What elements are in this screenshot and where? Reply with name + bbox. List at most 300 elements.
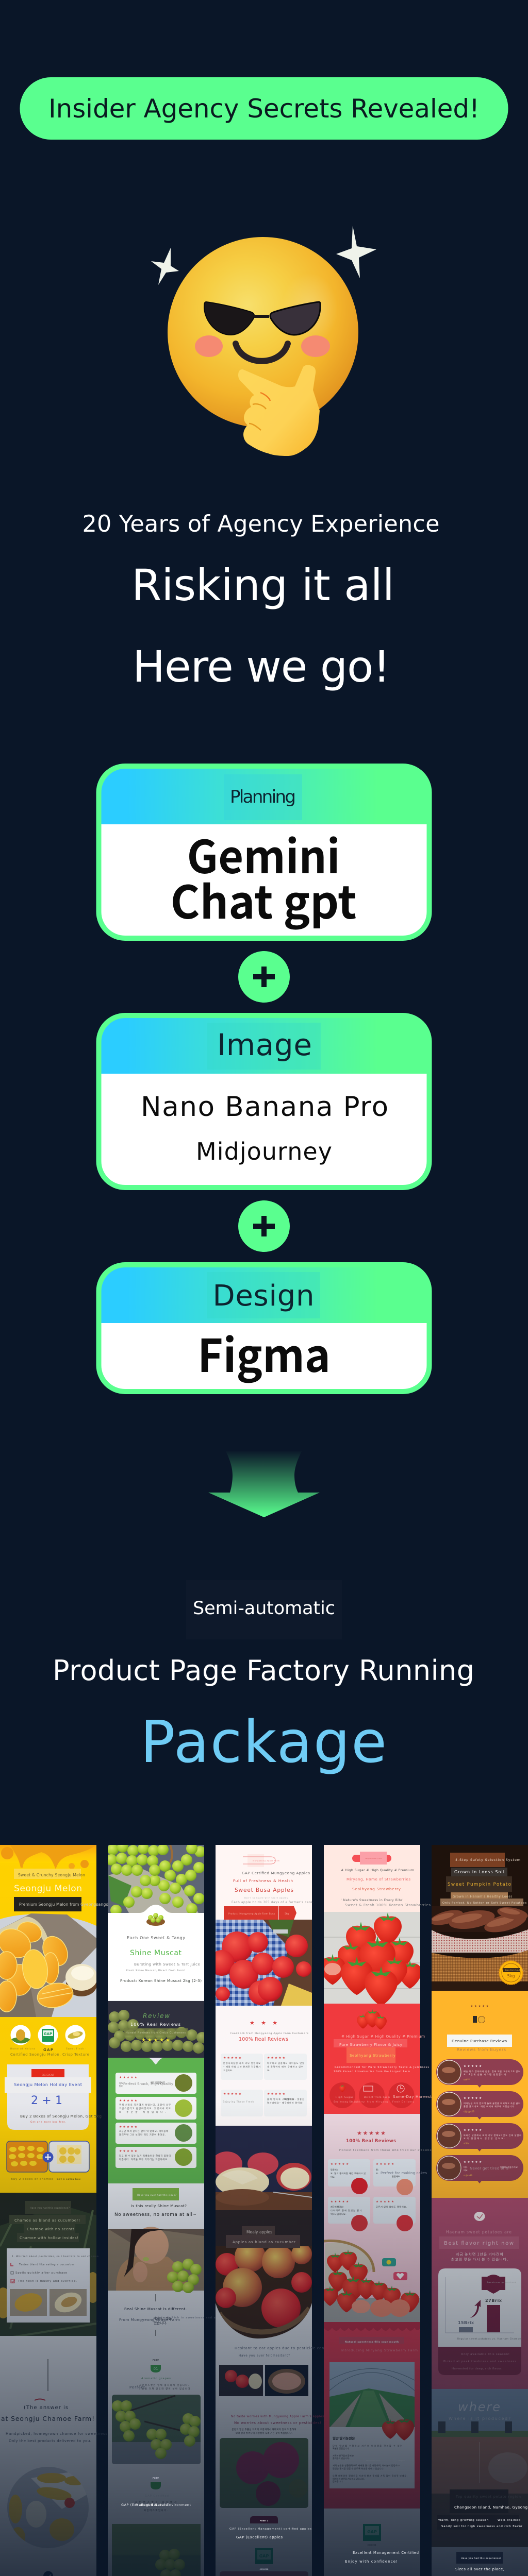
captions: column 3 gap: [229, 2520, 311, 2570]
product box images: Buy 2 boxes of chamoe: [11, 2178, 54, 2181]
strawberry hero photo: [320, 1912, 422, 2006]
brix chart card: [438, 2268, 521, 2375]
green review section: 정도: [119, 2081, 123, 2085]
panel: planning card: [96, 764, 432, 941]
pink review section: 달콤해요.: [392, 2175, 401, 2178]
orange review section: ★★★★★: [464, 2129, 482, 2132]
green review section: ★★★★★: [119, 2099, 137, 2103]
label: design: [207, 1272, 320, 1318]
icon: sparkle star right: [336, 226, 376, 278]
green review section: 조금만 보석 같다는 말이 딱 맞네요. 테이블에: [119, 2129, 168, 2133]
three badges: Certified Seongju Melon, Crisp Texture: [10, 2053, 89, 2057]
orange review section: 쓰5ils: [464, 2142, 469, 2145]
top pill banner: Insider Agency Secrets Revealed!: [48, 94, 480, 124]
honey drips: [0, 1845, 96, 1869]
tools: nano banana pro and midjourney: Midjourney: [196, 1138, 332, 1165]
different statement: Real Shine Muscat is different.: [124, 2307, 187, 2311]
label: semi-automatic: Semi-automatic: [193, 1598, 335, 1619]
problem section dark photo: Have you had this experience?: [30, 2207, 70, 2210]
pink review section: ★★★★★: [331, 2200, 349, 2204]
hero texts: Miryang, Home of Strawberries: [346, 1877, 410, 1882]
label: planning: [224, 774, 302, 820]
tools: gemini and chat gpt: Chat gpt: [170, 867, 357, 932]
maroon farm section: Introducing Miryang Strawberry Farm: [341, 2348, 418, 2352]
gap logo: [255, 2548, 273, 2564]
arrow: green down arrow: [208, 1450, 320, 1517]
captions: column 5 region and experience: Well-drained: [498, 2519, 520, 2522]
hero texts: [14, 1869, 122, 1911]
white intro section: Product: Korean Shine Muscat 2kg (2-3): [120, 1978, 202, 1983]
maroon farm section: 여러분의 방문을 기다리고 있습니다.: [333, 2477, 365, 2481]
no worries text: [231, 2415, 324, 2435]
maroon flavor section: [432, 2198, 528, 2389]
captions: column 2 points: Managed Nature: [136, 2503, 168, 2507]
red feature section: Same-Day Harvest: [393, 2095, 432, 2099]
gap logo: GAP: [259, 2554, 269, 2558]
captions: column 2 points: GAP (Excellent Natural Environment: [121, 2503, 191, 2507]
maroon farm section: [324, 2322, 420, 2509]
pink review section: 먹으니 꿀이 나요~: [331, 2212, 347, 2216]
red feature section: # High Sugar # High Quality # Premium: [341, 2034, 425, 2039]
green review section: ★★★★★: [119, 2125, 137, 2129]
review header: ★★★★★: [141, 2038, 170, 2043]
review section: ★★★★★: [223, 2056, 241, 2060]
issue section: [108, 2183, 204, 2229]
pink review section: ★★★★★: [376, 2200, 394, 2204]
different statement: 샤인머스캣은: [153, 2315, 172, 2320]
answer section: [0, 2336, 109, 2576]
basket apples photo: Mealy apples: [246, 2230, 272, 2234]
heading: 20 years: 20 Years of Agency Experience: [82, 511, 439, 537]
captions: column 5 region and experience: Sizes all over the place,: [455, 2567, 504, 2571]
pink review section: 요. 딸기 좋아하면 매년 구매하고 있: [331, 2172, 366, 2175]
checklist card: 1. Worried about pesticides, so I hesitate to eat chamoe: [12, 2255, 98, 2258]
white intro section: Fresh Shine Muscat, Direct from Farm!: [126, 1969, 185, 1972]
problem section dark photo: Chamoe as bland as cucumber!: [14, 2218, 80, 2223]
hero texts: Seolhyang Strawberry: [352, 1887, 401, 1891]
heading: product page factory running: Product Page Factory Running: [53, 1654, 474, 1687]
hesitant text and two photos: Have you ever felt hesitant?: [239, 2354, 290, 2358]
event card: Get one more box free.: [30, 2121, 66, 2124]
point 01: Aromatic grapes: [141, 2377, 171, 2380]
product box images: Get 1 extra box: [57, 2178, 80, 2181]
captions: column 5 region and experience: Have you had this experience?: [461, 2557, 502, 2560]
orange review section: 배송 박스 뜯자마자 감동. 진짜 썩은 고구마 1도 없어: [464, 2070, 520, 2073]
problem section dark photo: Chamoe with no scent!: [27, 2227, 74, 2231]
different statement: [119, 2294, 224, 2336]
captions: column 3 gap: 0000008: [260, 2568, 269, 2570]
captions: column 2 points: [121, 2477, 191, 2576]
panel: image card: [96, 1013, 432, 1190]
white intro section: Each One Sweet & Tangy: [127, 1936, 185, 1940]
review section: 게 잘먹어서 매년 구매하고 있어: [267, 2065, 303, 2069]
red feature section: Direct from Farm: [364, 2096, 390, 2099]
last apple photo: [220, 2571, 308, 2576]
red feature section: 100% Korean Strawberries from the Largest Farm: [334, 2070, 410, 2073]
gap logo: [324, 2509, 420, 2576]
green review section: 에도 방문합니다.: [151, 2081, 166, 2084]
answer section: Only the best products delivered to you.: [9, 2439, 91, 2443]
bottom fade overlay: [0, 2102, 528, 2576]
green review section: 올려두면 그냥 보기만 해도 기분이 좋아요.: [119, 2133, 166, 2137]
captions: column 3 gap: GAP (Excellent) apples: [236, 2535, 283, 2539]
event card: [5, 2064, 102, 2130]
review section: ★★★★★: [223, 2092, 241, 2096]
tools: gemini and chat gpt: [170, 821, 357, 932]
cut apple photo: [211, 2126, 312, 2210]
review section: [216, 2006, 312, 2126]
green review section: ★★★★★: [119, 2149, 137, 2153]
panel: column 3 busa apples page: [216, 1845, 324, 2576]
label: design: Design: [212, 1279, 315, 1313]
pink review section: 무른기 없이 쓸데도 탱탱어요.: [376, 2205, 407, 2209]
issue section: No sweetness, no aroma at all~: [114, 2212, 196, 2217]
captions: column 5 region and experience: Changseon Island, Namhae, Gyeong: [454, 2505, 527, 2510]
review header: Review: [143, 2012, 170, 2020]
hero texts: Sweet Busa Apples: [235, 1887, 293, 1893]
maroon farm section: Region: [399, 2460, 405, 2462]
captions: column 4 confidence: Excellent Management Certified: [353, 2551, 419, 2555]
vineyard photo: [112, 2395, 201, 2464]
orange review section: ★★★★★: [464, 2065, 482, 2068]
orange review section: sujina99: [464, 2174, 472, 2177]
review section: 100% Real Reviews: [239, 2037, 288, 2042]
red feature section: Pure Strawberry Flavor & Juicy: [339, 2042, 402, 2047]
tools: nano banana pro and midjourney: [141, 1091, 388, 1165]
panel: column 4 strawberry page: [324, 1845, 432, 2576]
panel: column 5 sweet potato page: [428, 1845, 528, 2576]
orange review section: 요게 달콤해서 실망한 없어요.: [464, 2137, 505, 2140]
farm field photo: Top quality sweet potato region: [455, 2495, 521, 2499]
point 01: 기간을 거쳐 당도와 향이 살아 있습니다.: [139, 2387, 191, 2391]
different statement: Rich in sweetness and aroma: [172, 2316, 224, 2319]
green review section: 주석 선물로 지인에게 보냈는데, 포장이 너무: [119, 2103, 171, 2107]
icon: thinking emoji with sunglasses: [151, 226, 376, 456]
hero texts: Don't Compare with Store Apples: [244, 1897, 288, 1899]
review section: ★★★: [250, 2020, 277, 2026]
review section: 문경사과농원 사과 너무 맛있어요: [223, 2061, 260, 2065]
farm field photo: [432, 2389, 528, 2547]
basket of strawberries photo: [322, 2241, 420, 2322]
sweet potato hero photo: [428, 1845, 528, 1991]
point 01: 01: [154, 2367, 158, 2371]
issue section: Have you ever had this issue?: [137, 2194, 177, 2197]
point 01: Perfect: [129, 2385, 145, 2389]
no worries text: 보라 향이 뛰어나며 저장성이 오래 가는 것이 특징입니다.: [236, 2431, 292, 2435]
orange review section: [432, 1991, 528, 2198]
event card: 2 + 1: [31, 2094, 62, 2107]
captions: column 5 region and experience: Warm, long growing season: [438, 2519, 488, 2522]
green review section: [108, 2058, 204, 2183]
orange review section: ★★★★★: [464, 2097, 482, 2100]
hero texts: GAP Certified Mungyeong Apples: [242, 1871, 310, 1875]
maroon flavor section: Best flavor right now: [444, 2241, 514, 2246]
basket apples photo: [216, 2210, 312, 2339]
orange review section: Reviews from Buyers: [457, 2047, 506, 2052]
red feature section: High Sugar: [336, 2096, 353, 2099]
answer section: Handpicked, homegrown chamoe for sweetness.: [6, 2432, 109, 2436]
circular melon box photo: [7, 2467, 89, 2548]
orange review section: Never get tired of it: [470, 2166, 508, 2171]
pink review section: 어요.: [331, 2175, 335, 2179]
checklist card: The flesh is mushy and overripe.: [18, 2280, 77, 2283]
pink review section: Honest feedback from those who tried our strawberries: [339, 2149, 440, 2152]
review section: 명사과네요~ 재구매하러 왔어요!: [267, 2101, 303, 2105]
point 02: 샤인머스캣을 농장에서: [135, 2500, 176, 2504]
white intro section: Bursting with Sweet & Tart Juice: [134, 1962, 200, 1967]
no worries text: No taste worries with Mungyeong Apple Farm's apples: [231, 2415, 324, 2418]
farm field photo: where: [458, 2400, 500, 2414]
red feature section: [324, 2004, 432, 2114]
pink review section: 달콤해서: [331, 2168, 339, 2172]
orange review section: Genuine Purchase Reviews: [452, 2039, 507, 2043]
red feature section: Seolhyang Strawberry: [334, 2100, 365, 2104]
heading: here we go: Here we go!: [133, 641, 390, 692]
pink review section: ★★★★★: [357, 2130, 386, 2137]
green review section: 다릅니다. 가족들 모두 기다리는 과일이에요.: [119, 2158, 168, 2161]
green review section: 또 주문할 예정입니다.: [119, 2110, 166, 2114]
maroon farm section: 저희 농원은 친환경적으로 재배된 딸기를 자랑하며, 여러분이 건강하고: [333, 2464, 400, 2467]
point 01: [129, 2359, 191, 2391]
pink review section: 줄:: [376, 2168, 378, 2172]
maroon farm section: 당일 딸기를 수확하고 저온의 아이템을 관리할 수 있는: [333, 2444, 402, 2448]
dark bottom section: [432, 2547, 528, 2576]
hesitant text and two photos: Hesitant to eat apples due to pesticide concerns: [235, 2346, 335, 2350]
melon hero photo: [0, 1913, 97, 2017]
label: semi-automatic: [186, 1580, 342, 1639]
tools: nano banana pro and midjourney: Nano Banana Pro: [141, 1091, 388, 1123]
hero texts: Sweet & Crunchy Seongju Melon: [18, 1873, 85, 1877]
brix chart card: Only available this season!: [461, 2353, 509, 2356]
sweet potato hero photo: Pesticide-Free: [505, 1969, 525, 1972]
hero text boxes: Grown in Hanam's Healthy Loess: [453, 1895, 512, 1899]
hesitant text and two photos: [219, 2346, 335, 2396]
different statement: From Mungyeong Grape Farm: [119, 2317, 180, 2322]
hero texts: Full of Freshness & Health: [233, 1878, 293, 1883]
bright captions over fade: [24, 2477, 527, 2576]
red feature section: Recommended for Pure Strawberry Taste & Juiciness: [335, 2066, 429, 2069]
white intro section: [108, 1905, 204, 2001]
product box images: [7, 2141, 89, 2181]
hero texts: # High Sugar # High Quality # Premium: [341, 1868, 414, 1872]
orange review section: 대다: [464, 2165, 468, 2169]
green review section: ★★★★★: [119, 2076, 137, 2079]
red feature section: from Miryang: [367, 2100, 388, 2104]
review section: 고 있어요.: [223, 2069, 233, 2072]
event card: Buy 2 Boxes of Seongju Melon, Get 5kg: [20, 2114, 102, 2119]
woman tasting grapes photo: [108, 2227, 204, 2293]
hero texts: Seongju Melon: [14, 1884, 82, 1894]
orange review section: osk***: [464, 2078, 470, 2081]
brix chart card: Sweetness guaranteed: [487, 2281, 517, 2283]
panel: column 2 shine muscat page: [106, 1841, 224, 2576]
pink review section: 요.: [376, 2172, 378, 2175]
hero texts: 5kg: [285, 1912, 289, 1916]
captions: column 2 points: POINT: [153, 2477, 159, 2479]
label: image: Image: [217, 1027, 312, 1062]
basket apples photo: Apples as bland as cucumber: [233, 2240, 295, 2244]
orange review section: 대청상ps23: [464, 2110, 474, 2113]
review section: ~ 매일 아침 사과 한개로 건강챙기: [223, 2065, 260, 2069]
review section: 요.: [267, 2069, 270, 2072]
maroon farm section: 오랜 재배와의 정성으로 사과의 향과 풍미를 가득 담아 정성껏 보내요.: [333, 2474, 407, 2478]
panel: design card: [96, 1262, 432, 1394]
orange review section: 흘를 흘리네요. 매년 여기서 재구매 하겠습니다.: [464, 2105, 515, 2108]
hero text boxes: Only Perfect, No Rotten or Soft Sweet Potatoes: [442, 1902, 526, 1905]
point 01: 샤인머스캣은 일찍 출하되지 않습니다.: [139, 2383, 189, 2387]
icon: plus 1: [238, 951, 290, 1003]
gap logo: GAP: [367, 2530, 377, 2534]
orange review section: ★★★★★: [470, 2004, 489, 2008]
captions: column 3 gap: GAP (Excellent Management) certified apples: [229, 2528, 311, 2531]
green review section: 뛰어: [119, 2084, 123, 2088]
hero texts: Mungyeong Apple Farm: [253, 1860, 279, 1862]
point 01: POINT: [153, 2359, 159, 2361]
maroon farm section: 감사합니다.: [333, 2480, 343, 2483]
three badges: Home of Melons: [10, 2047, 36, 2050]
maroon farm section: Make memories: [366, 2460, 380, 2462]
hero texts: Product: Mungyeong Apple Farm Busa: [228, 1912, 275, 1916]
hero texts: Yang Strawberry Farm: [365, 1857, 382, 1859]
green review section: Perfect Snack, High Quality: [123, 2082, 173, 2086]
orange review section: 어머님은 아이 믿으며 늘에 꿀맛을 봐서하고 속은 꿀이: [464, 2102, 520, 2105]
orange review section: 편하여서 믿을 수가 요: [500, 2165, 518, 2169]
orange review section: 어요: [464, 2168, 468, 2172]
review section: ★★★★★: [267, 2056, 285, 2060]
green review section: 믿고 살 수 있는 농가 직배송이라 확실히 품질이: [119, 2154, 171, 2158]
maroon farm section: 특별한 공간입니다.: [333, 2447, 350, 2450]
hero text boxes: Sweet Pumpkin Potato: [448, 1882, 511, 1887]
pink review section: 재구매 했어요!: [331, 2205, 343, 2209]
white intro section: Shine Muscat: [130, 1949, 182, 1957]
three badges: [10, 2025, 89, 2057]
second vineyard photo: [112, 2524, 201, 2576]
pink review section: 다이어트 중에 맛있는 딸기: [331, 2209, 361, 2212]
problem section dark photo: Chamoe with hollow insides!: [20, 2236, 78, 2240]
point 1 tag: [250, 2516, 278, 2523]
maroon flavor section: 지금 놓치면 1년을 기다려야: [456, 2252, 504, 2257]
check icon and sweetness text: [35, 2571, 61, 2576]
hero texts: Each apple holds 365 days of a farmer's care.: [232, 1901, 314, 1904]
red feature section: Seolhyang Strawberry: [350, 2053, 396, 2058]
farm field photo: Where is it produced?: [449, 2416, 510, 2421]
hero texts: ' Nature's Sweetness in Every Bite': [341, 1899, 403, 1902]
hero texts: [216, 1845, 314, 1920]
three badges: Sweet Flesh ·: [66, 2047, 86, 2050]
orange review section: 요. 4단계 선별 시스템 인정합니다.: [464, 2073, 507, 2076]
review section: 올해 명사과 구매했어요. 맛좋은: [267, 2097, 304, 2101]
point 02: [135, 2482, 176, 2512]
maroon farm section: 맛있는 딸기를 맛볼 수 있도록 최선을 다하고 있습니다.: [333, 2467, 384, 2470]
pink review section: Perfect for making cakes: [381, 2171, 427, 2175]
three badges: GAP: [44, 2032, 52, 2036]
hero texts: [341, 1852, 431, 1907]
red feature section: Fresh Delivery: [392, 2100, 414, 2104]
brix chart card: Harvested for deep, rich flavor.: [452, 2367, 502, 2370]
heading: risking it all: Risking it all: [131, 560, 394, 611]
sweet potato hero photo: 5kg: [507, 1974, 515, 1978]
answer section: at Seongju Chamoe Farm!: [1, 2415, 94, 2422]
captions: column 5 region and experience: Sandy soil for high sweetness and rich flavor: [441, 2525, 523, 2528]
hero texts: Sweet & Fresh 100% Korean Strawberries: [345, 1903, 431, 1907]
checklist card: Spoils quickly after purchase: [15, 2272, 68, 2275]
review header: [108, 2001, 208, 2058]
review section: 4포 좋아 맛: [284, 2097, 294, 2101]
pink review section: ★★★★★: [376, 2163, 394, 2166]
label: planning: Planning: [230, 787, 296, 807]
review section: ★★★★★: [267, 2092, 285, 2096]
maroon flavor section: 최고의 맛을 다시 볼 수 있습니다.: [451, 2257, 508, 2262]
gap logo: 0000008: [368, 2544, 376, 2546]
hero text boxes: Grown in Loess Soil: [454, 1870, 504, 1874]
three badges: GAP: [43, 2048, 53, 2052]
grape hero photo: [108, 1845, 204, 1913]
different statement: 있습니다.: [154, 2320, 167, 2325]
maroon farm section: 밀양 딸기농원은: [333, 2435, 355, 2441]
icon: sparkle star left: [151, 248, 179, 285]
captions: column 4 confidence: Enjoy with confidence!: [345, 2560, 398, 2564]
apple tree photo: [220, 2438, 308, 2508]
checklist card: Tastes bland like eating a cucumber.: [19, 2263, 75, 2266]
orange review section: 봐버린 달콤해서 포기 너무 편해요! 맛도 진짜 달콤하: [464, 2133, 521, 2137]
brix chart card: 15Brix: [458, 2320, 474, 2325]
top pill banner: [20, 77, 508, 140]
orange review section: ★★★★★: [464, 2161, 482, 2164]
heading: package: Package: [140, 1709, 387, 1776]
panel: column 1 seongju melon page: [0, 1845, 108, 2576]
pink review section: ★★★★★: [331, 2163, 349, 2166]
label: image: [207, 1023, 321, 1070]
captions: column 3 gap: POINT 1: [260, 2520, 269, 2522]
checklist card: [7, 2248, 98, 2323]
maroon flavor section: Haenam sweet potatoes are: [446, 2230, 512, 2234]
answer section: (The answer is: [24, 2405, 68, 2411]
hero text boxes: [440, 1853, 526, 1906]
review section: 아삭하고 달콤해서 아이들도 맛있: [267, 2061, 304, 2065]
review section: Enjoying These Fresh: [223, 2100, 254, 2103]
brix chart card: Regular sweet potatoes vs. Haenam Chamoe: [457, 2337, 521, 2341]
icon: plus 2: [238, 1200, 290, 1252]
review section: Feedback from Mungyeong Apple Farm Customers: [230, 2032, 309, 2035]
issue section: Is this really Shine Muscat?: [131, 2204, 187, 2208]
brix chart card: Picked at peak freshness and sweetness: [443, 2360, 516, 2363]
event card: BIG EVENT: [42, 2074, 54, 2077]
brix chart card: 27Brix: [485, 2298, 502, 2303]
maroon farm section: 즐거움이 있습니다.: [333, 2456, 350, 2460]
pink review section: 100% Real Reviews: [346, 2139, 396, 2144]
maroon farm section: 가족과 친구들과 함께 손: [333, 2454, 354, 2458]
no worries text: No worries about sweetness or pesticides!: [234, 2421, 321, 2425]
chat bubble icons: [382, 2258, 407, 2280]
maroon farm section: Natural sweetness fills your mouth: [345, 2341, 399, 2344]
review header: Honest Reviews from Omija Customers: [126, 2031, 186, 2035]
green review section: 고급스럽다고 감탄하셨어요. 맛있어서 저도: [119, 2107, 171, 2110]
point 02: GAP Certified: [145, 2495, 169, 2498]
problem section dark photo: [0, 2193, 100, 2339]
hero text boxes: 4-Step Safety Selection System: [455, 1858, 520, 1862]
review header: 100% Real Reviews: [130, 2022, 180, 2027]
point 02: 샤인머스캣입니다.: [144, 2509, 168, 2512]
hero texts: Premium Seongju Melon from Gyeongsangdo Farm: [19, 1902, 122, 1907]
captions: column 4 confidence: [345, 2551, 419, 2564]
captions: column 5 region and experience: [438, 2505, 527, 2576]
tools: gemini and chat gpt: Gemini: [187, 821, 340, 887]
event card: Seongju Melon Holiday Event: [14, 2082, 82, 2087]
no worries text: 문경의 명산 주흘산 자락의 고랭지에서 재배되어 맛이 탁월하여: [232, 2428, 296, 2431]
tool: figma: Figma: [197, 1320, 331, 1385]
apple hero photo: [209, 1920, 312, 2006]
pink review section: [324, 2114, 440, 2322]
